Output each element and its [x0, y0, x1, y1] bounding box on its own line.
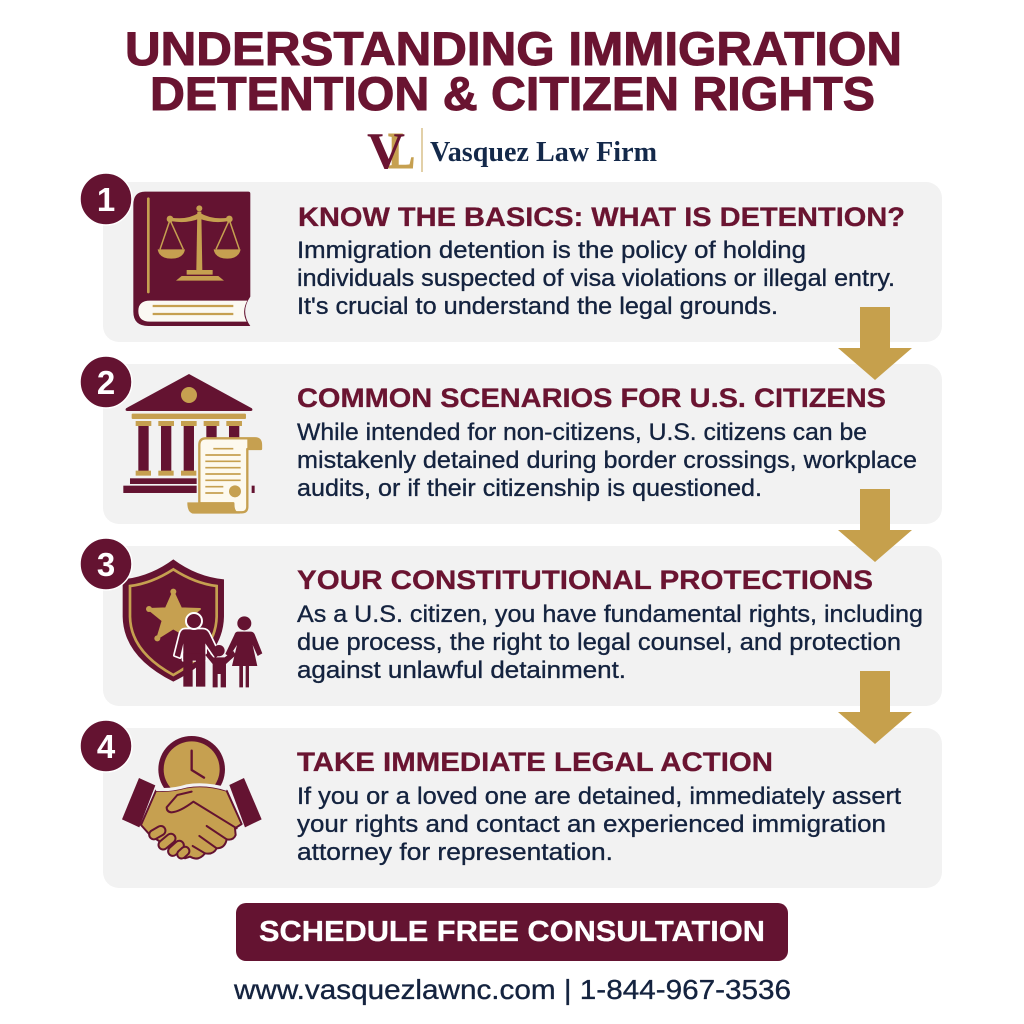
icon: law book with scales: [133, 192, 250, 326]
heading 3: YOUR CONSTITUTIONAL PROTECTIONS: [297, 565, 873, 595]
arrow: step 2 to 3: [838, 489, 912, 562]
logo: Vasquez Law Firm: Vasquez Law Firm: [430, 137, 657, 168]
contact line: www.vasquezlawnc.com | 1-844-967-3536: [233, 974, 791, 1005]
logo: Vasquez Law Firm: L: [388, 123, 415, 180]
badge: number 3: 3: [97, 546, 115, 583]
title: DETENTION & CITIZEN RIGHTS: [150, 67, 875, 120]
badge: number 4: [80, 720, 132, 772]
panel 3: constitutional protections: [80, 538, 942, 706]
title: UNDERSTANDING IMMIGRATION: [125, 22, 902, 75]
title: [125, 22, 902, 120]
logo: Vasquez Law Firm: V: [367, 123, 405, 180]
panel 4: immediate legal action: [80, 720, 942, 888]
badge: number 2: [80, 356, 132, 408]
body text 3: As a U.S. citizen, you have fundamental rights, including: [297, 601, 923, 628]
body text 1: It's crucial to understand the legal grounds.: [297, 293, 778, 320]
arrow: step 1 to 2: [838, 307, 912, 380]
badge: number 2: 2: [97, 364, 115, 401]
heading 2: COMMON SCENARIOS FOR U.S. CITIZENS: [297, 383, 886, 413]
body text 2: [297, 419, 917, 502]
body text 2: mistakenly detained during border crossings, workplace: [297, 447, 917, 474]
body text 3: due process, the right to legal counsel, and protection: [297, 629, 901, 656]
badge: number 3: [80, 538, 132, 590]
heading 1: KNOW THE BASICS: WHAT IS DETENTION?: [298, 202, 905, 232]
body text 1: individuals suspected of visa violations or illegal entry.: [297, 265, 895, 292]
body text 1: [297, 237, 895, 320]
body text 4: attorney for representation.: [297, 839, 613, 866]
badge: number 4: 4: [97, 728, 116, 765]
body text 2: While intended for non-citizens, U.S. citizens can be: [297, 419, 867, 446]
arrow: step 3 to 4: [838, 671, 912, 744]
body text 4: [297, 783, 901, 866]
logo: Vasquez Law Firm: [367, 123, 657, 180]
icon: handshake and clock: [122, 736, 262, 860]
badge: number 1: 1: [97, 181, 115, 218]
body text 1: Immigration detention is the policy of holding: [297, 237, 806, 264]
button: schedule free consultation: SCHEDULE FREE CONSULTATION: [259, 916, 765, 948]
body text 4: If you or a loved one are detained, immediately assert: [297, 783, 901, 810]
heading 4: TAKE IMMEDIATE LEGAL ACTION: [297, 747, 773, 777]
body text 2: audits, or if their citizenship is questioned.: [297, 475, 762, 502]
panel 2: common scenarios: [80, 356, 942, 524]
icon: shield with star and family: [123, 559, 262, 687]
body text 4: your rights and contact an experienced immigration: [297, 811, 886, 838]
button: schedule free consultation: [236, 903, 788, 961]
icon: courthouse and scroll: [123, 374, 262, 514]
body text 3: [297, 601, 923, 684]
body text 3: against unlawful detainment.: [297, 657, 626, 684]
badge: number 1: [80, 173, 132, 225]
panel 1: know the basics: [80, 173, 942, 342]
